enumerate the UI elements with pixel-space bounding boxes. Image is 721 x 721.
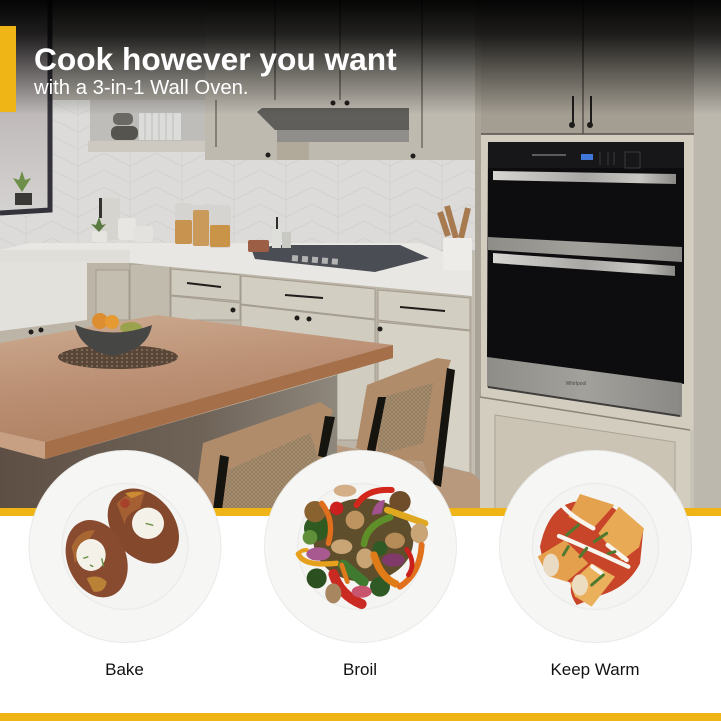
farmhouse sink [0, 262, 87, 331]
food: broiled vegetables [298, 485, 428, 604]
upper cabinets and open shelf [53, 0, 475, 160]
yellow band above panel [0, 508, 721, 516]
bottles [272, 228, 281, 248]
chair left [198, 402, 335, 510]
storage jars [175, 203, 192, 244]
countertop items [91, 198, 472, 270]
range hood [257, 108, 409, 160]
double wall oven: Whirlpool [566, 381, 586, 387]
plate: broil [264, 450, 456, 642]
oven middle steel band [488, 237, 682, 262]
kitchen photo scene [0, 0, 721, 510]
drawer below oven [480, 397, 690, 510]
label: keep warm: Keep Warm [550, 660, 640, 679]
double wall oven [487, 142, 684, 417]
floor [337, 445, 480, 510]
yellow accent tab [0, 26, 16, 112]
window with dark frame [0, 0, 50, 213]
label: bake: Bake [105, 660, 144, 679]
island table [0, 315, 393, 459]
label: broil: Broil [343, 660, 377, 679]
oven lower handle [493, 253, 675, 276]
oven bottom steel panel [487, 357, 682, 417]
subtitle: with a 3-in-1 Wall Oven. [33, 77, 249, 99]
plate: bake [29, 450, 221, 642]
food: enchiladas [538, 494, 644, 607]
utensil holder [440, 206, 468, 238]
title: Cook however you want [34, 41, 397, 77]
oven upper handle [493, 171, 676, 184]
space under the island [0, 375, 337, 510]
chair right [356, 358, 455, 487]
yellow band at bottom [0, 713, 721, 721]
food: baked potatoes [54, 474, 194, 607]
lower white panel [0, 508, 721, 721]
tall oven cabinetry [475, 0, 721, 510]
fruit bowl on woven mat [58, 313, 178, 369]
top dark gradient [0, 0, 721, 115]
countertop [0, 243, 472, 296]
canisters and small plant [100, 198, 120, 240]
base cabinets [0, 262, 472, 473]
tile backsplash [0, 100, 475, 250]
small bowl [248, 240, 269, 252]
cooktop [252, 245, 429, 272]
plate: keep warm [500, 450, 692, 642]
